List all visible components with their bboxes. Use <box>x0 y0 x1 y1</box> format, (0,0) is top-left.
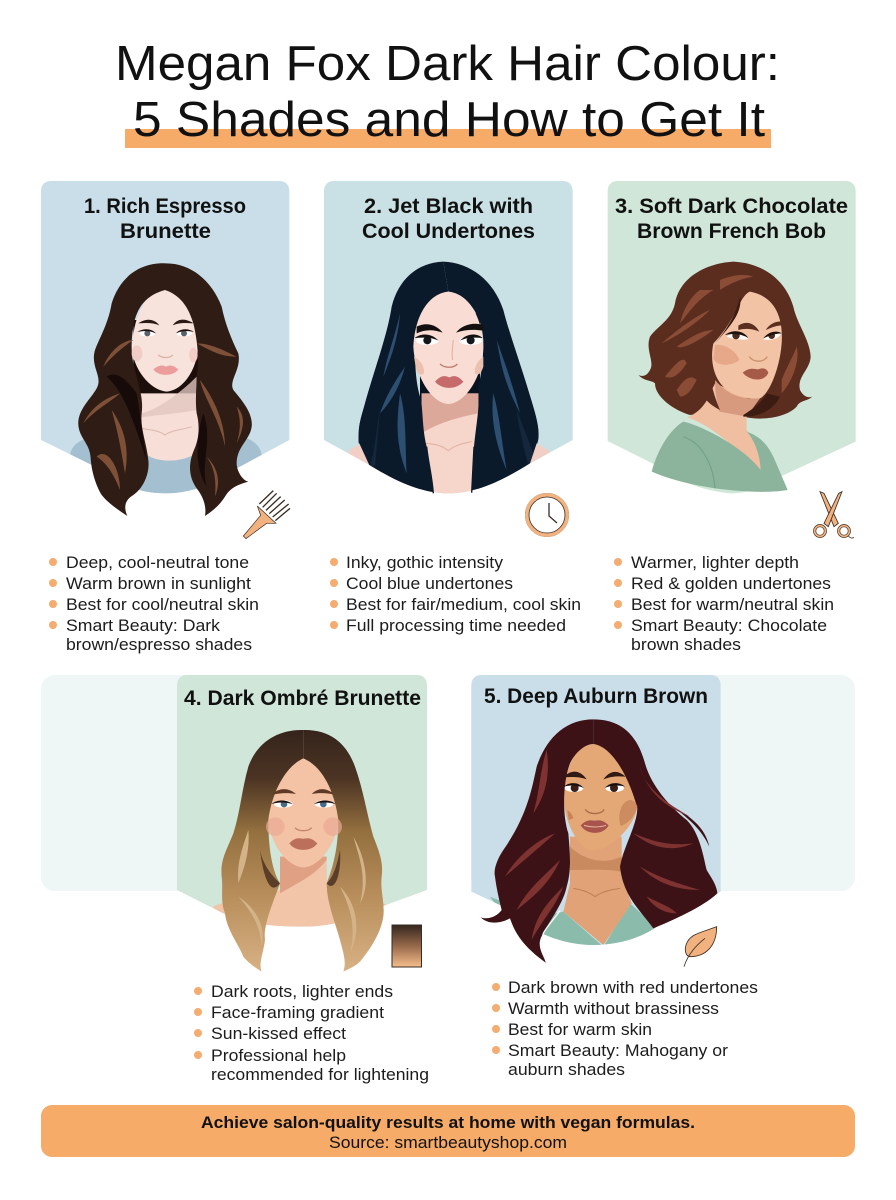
heading 1: 1. Rich Espresso <box>84 195 246 218</box>
list 1: Smart Beauty: Dark <box>66 616 221 635</box>
portrait 1 <box>70 263 262 516</box>
icon: scissors <box>815 492 854 538</box>
list 1: Deep, cool-neutral tone <box>66 553 249 572</box>
heading 1: Brunette <box>120 220 211 243</box>
panel: 5 deep auburn brown <box>471 675 855 1079</box>
list 5: Best for warm skin <box>508 1020 652 1039</box>
heading 4: 4. Dark Ombré Brunette <box>184 687 421 710</box>
list 4: Face-framing gradient <box>211 1003 384 1022</box>
list 4 <box>194 982 429 1084</box>
heading 5: 5. Deep Auburn Brown <box>484 685 708 708</box>
heading 1 <box>41 181 289 493</box>
icon: leaf <box>684 927 717 967</box>
footer banner <box>41 1105 855 1157</box>
heading 2: Cool Undertones <box>362 220 535 243</box>
heading 3: Brown French Bob <box>637 220 826 243</box>
list 1 <box>49 553 259 654</box>
list 4: Dark roots, lighter ends <box>211 982 393 1001</box>
list 5: Warmth without brassiness <box>508 999 719 1018</box>
list 3: Red & golden undertones <box>631 574 831 593</box>
footer source: Source: smartbeautyshop.com <box>329 1133 567 1152</box>
portrait 5 <box>481 719 717 970</box>
title <box>115 37 780 148</box>
heading 2 <box>324 181 573 493</box>
list 4: recommended for lightening <box>211 1065 429 1084</box>
icon: clock <box>526 494 568 536</box>
portrait 3 <box>638 262 812 492</box>
list 1: Best for cool/neutral skin <box>66 595 259 614</box>
panel: 3 soft dark chocolate <box>608 181 856 654</box>
list 2 <box>330 553 581 635</box>
portrait 2 <box>348 262 550 513</box>
list 2: Full processing time needed <box>346 616 566 635</box>
list 5: Dark brown with red undertones <box>508 978 758 997</box>
panel: 4 dark ombre brunette <box>41 675 429 1084</box>
heading 3 <box>608 181 856 493</box>
list 3: Best for warm/neutral skin <box>631 595 834 614</box>
heading 5 <box>471 675 721 945</box>
icon: tint brush <box>243 491 290 539</box>
list 5 <box>492 978 758 1079</box>
list 5: auburn shades <box>508 1060 625 1079</box>
title line 1: Megan Fox Dark Hair Colour: <box>115 37 780 91</box>
title highlight bar <box>125 129 771 148</box>
heading 4 <box>177 675 427 927</box>
list 1: Warm brown in sunlight <box>66 574 251 593</box>
list 2: Inky, gothic intensity <box>346 553 504 572</box>
panel backdrop 5 <box>471 675 855 891</box>
title line 2: 5 Shades and How to Get It <box>133 93 765 147</box>
list 2: Cool blue undertones <box>346 574 513 593</box>
list 3: Smart Beauty: Chocolate <box>631 616 827 635</box>
list 3 <box>614 553 834 654</box>
icon: ombre swatch <box>392 925 422 967</box>
list 3: brown shades <box>631 635 741 654</box>
list 3: Warmer, lighter depth <box>631 553 799 572</box>
list 1: brown/espresso shades <box>66 635 252 654</box>
list 4: Professional help <box>211 1046 346 1065</box>
panel: 2 jet black <box>324 181 581 635</box>
panel backdrop 4 <box>41 675 427 891</box>
list 5: Smart Beauty: Mahogany or <box>508 1041 728 1060</box>
portrait 4 <box>213 730 392 972</box>
heading 3: 3. Soft Dark Chocolate <box>615 195 848 218</box>
heading 2: 2. Jet Black with <box>364 195 533 218</box>
panel: 1 rich espresso brunette <box>41 181 290 654</box>
list 4: Sun-kissed effect <box>211 1024 346 1043</box>
list 2: Best for fair/medium, cool skin <box>346 595 581 614</box>
footer message: Achieve salon-quality results at home with vegan formulas. <box>201 1113 695 1132</box>
